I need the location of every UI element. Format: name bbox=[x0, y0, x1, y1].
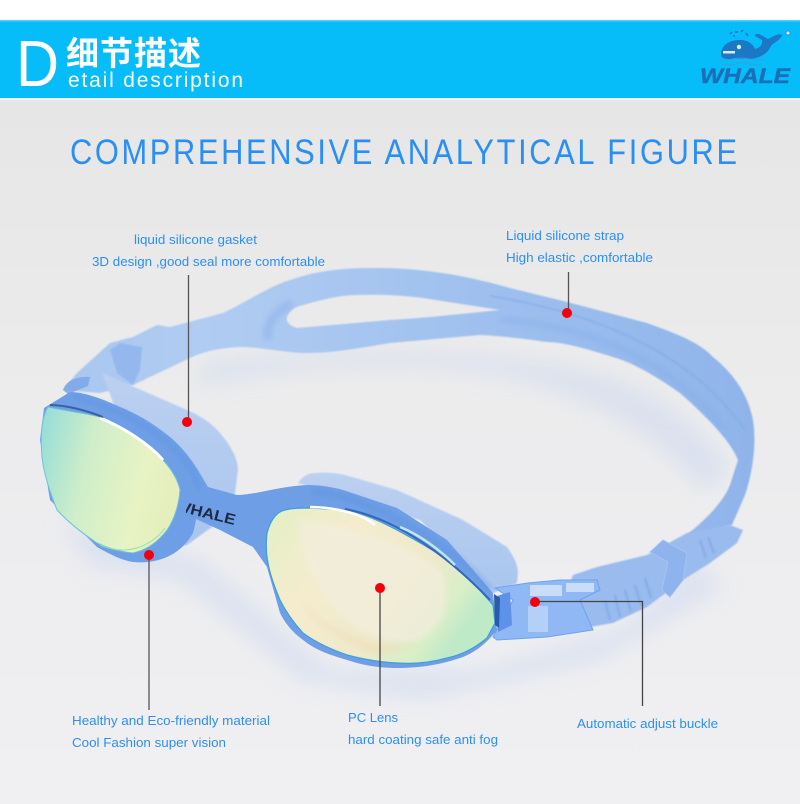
heading: English subtitle: etail description bbox=[68, 69, 243, 92]
goggles illustration bbox=[40, 268, 754, 700]
callout: liquid silicone strap: High elastic ,comfortable bbox=[506, 251, 653, 265]
right gasket bbox=[298, 473, 518, 593]
frame and bridge bbox=[40, 392, 497, 668]
callout: automatic adjust buckle: Automatic adjust buckle bbox=[577, 717, 718, 731]
left lens bbox=[41, 405, 180, 553]
header banner bbox=[0, 20, 800, 100]
left strap keeper bbox=[110, 343, 142, 385]
callout: healthy material bbox=[72, 550, 270, 750]
heading: Chinese title: 细节描述 bbox=[66, 35, 201, 72]
right strap keeper bbox=[650, 540, 687, 597]
callout: PC lens bbox=[348, 583, 498, 747]
mirror highlight bbox=[345, 509, 490, 600]
callout: liquid silicone strap: Liquid silicone strap bbox=[506, 229, 624, 243]
callout: healthy material: Cool Fashion super vision bbox=[72, 736, 226, 750]
right lens bbox=[266, 507, 495, 663]
tail ribs bbox=[605, 537, 714, 620]
mirror highlight bbox=[100, 418, 163, 460]
callout: PC lens: hard coating safe anti fog bbox=[348, 733, 498, 747]
title: COMPREHENSIVE ANALYTICAL FIGURE bbox=[70, 132, 737, 171]
callout: healthy material: Healthy and Eco-friendly material bbox=[72, 714, 270, 728]
inner lens tint bbox=[300, 520, 447, 642]
callout: automatic adjust buckle bbox=[530, 597, 718, 731]
logo wordmark: WHALE bbox=[700, 65, 791, 88]
strap shading bbox=[268, 303, 725, 430]
bridge WHALE print: WHALE bbox=[173, 497, 237, 529]
callout: liquid silicone gasket bbox=[92, 233, 325, 427]
frame darker band bbox=[72, 396, 200, 490]
strap bbox=[63, 268, 754, 540]
callout: PC lens: PC Lens bbox=[348, 711, 398, 725]
right strap tail bbox=[560, 525, 743, 627]
soft shadows bbox=[60, 353, 730, 700]
logo: whale bbox=[700, 30, 791, 88]
buckle bbox=[493, 580, 600, 640]
callout: liquid silicone strap bbox=[506, 229, 653, 318]
callout: liquid silicone gasket: liquid silicone gasket bbox=[134, 233, 258, 247]
callout: liquid silicone gasket: 3D design ,good seal more comfortable bbox=[92, 255, 325, 269]
left gasket bbox=[102, 373, 238, 547]
heading: D initial: D bbox=[16, 27, 59, 100]
